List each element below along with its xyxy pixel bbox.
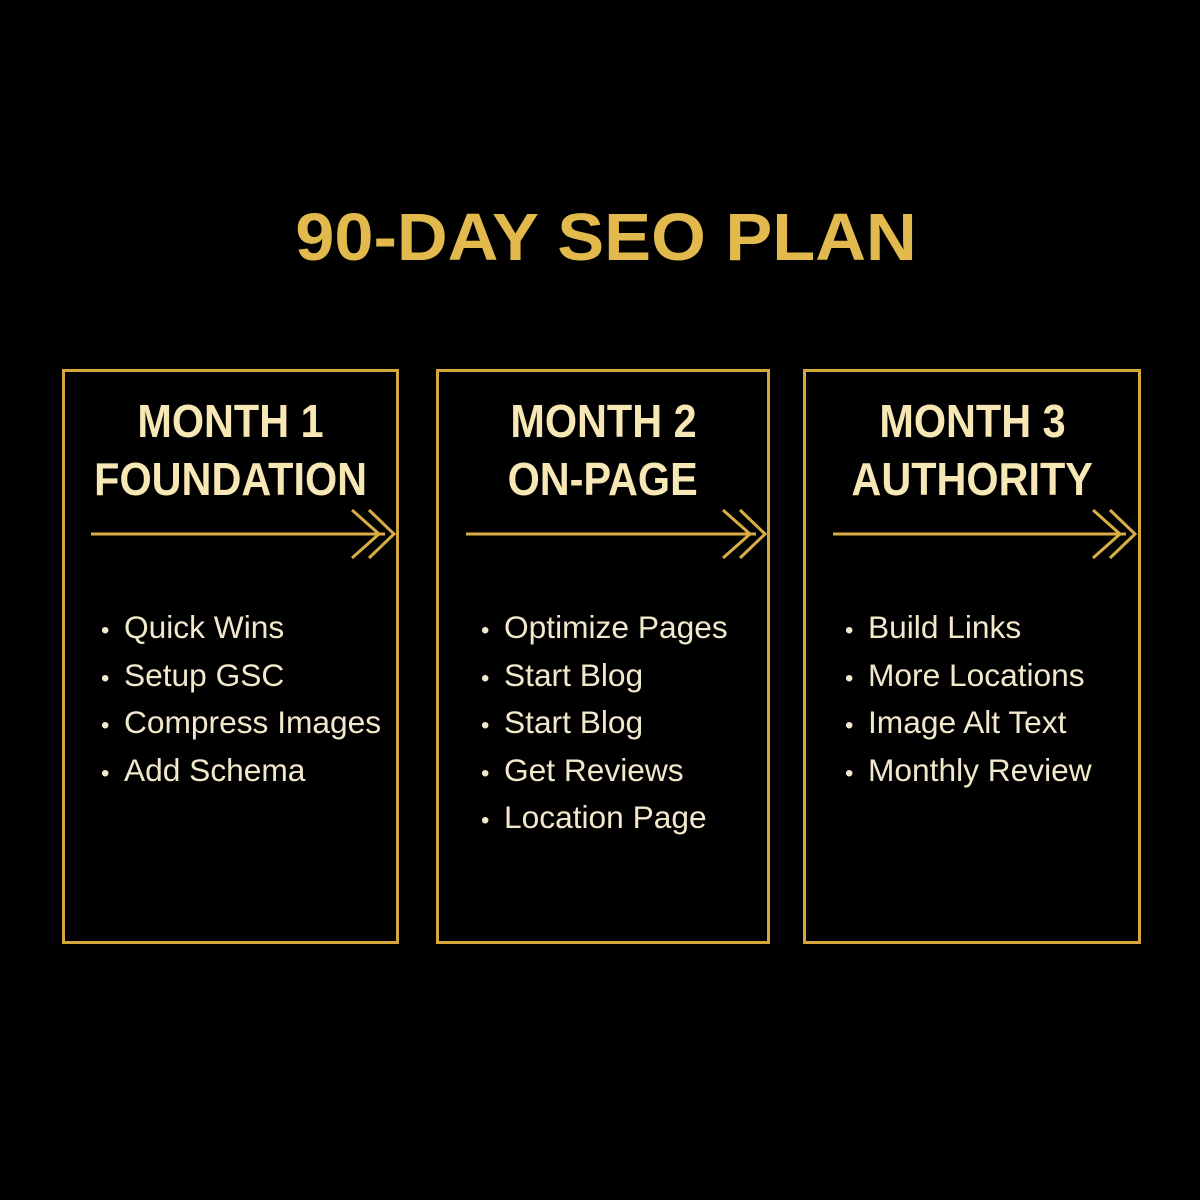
list: month 1: Setup GSC [124,656,284,692]
list: month 2 [482,609,728,835]
list: month 1 [102,609,381,788]
list: month 2: Get Reviews [504,752,684,788]
list: month 3 [846,609,1092,788]
list: month 2: Location Page [504,799,707,835]
heading: month 3: MONTH 3 [879,395,1065,447]
panel: month 3 [803,369,1141,944]
heading: month 3 [851,395,1093,505]
list: month 3: More Locations [868,656,1085,692]
list: month 2: Optimize Pages [504,609,728,645]
arrow 3 [833,510,1135,558]
list: month 1: Quick Wins [124,609,284,645]
list: month 2: Start Blog [504,704,643,740]
heading: month 1 [94,395,367,505]
arrow 2 [466,510,765,558]
arrow 1 [91,510,394,558]
list: month 1: Compress Images [124,704,381,740]
heading: month 1: MONTH 1 [137,395,324,447]
list: month 3: Build Links [868,609,1021,645]
list: month 1: Add Schema [124,752,305,788]
panel: month 1 [62,369,399,944]
heading: month 2: MONTH 2 [510,395,696,447]
heading: month 3: AUTHORITY [851,453,1093,505]
list: month 2: Start Blog [504,656,643,692]
list: month 3: Monthly Review [868,752,1092,788]
heading: month 1: FOUNDATION [94,453,367,505]
list: month 3: Image Alt Text [868,704,1066,740]
arrows [91,508,1138,560]
heading: month 2: ON-PAGE [508,453,698,505]
panel: month 2 [436,369,770,944]
title: 90-DAY SEO PLAN [295,200,917,275]
heading: month 2 [508,395,698,505]
